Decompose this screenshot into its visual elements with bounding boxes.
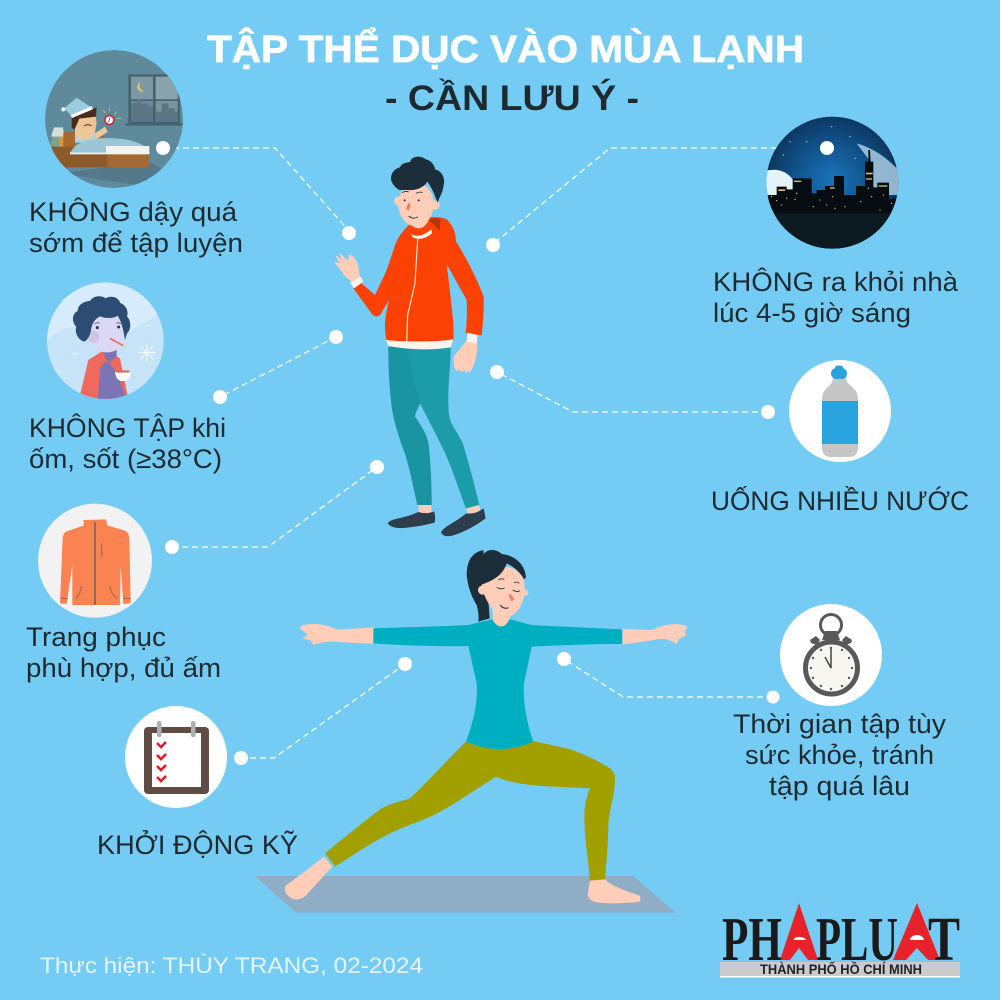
panel: sick person icon (47, 282, 164, 403)
connector dots (156, 141, 834, 765)
trousers (388, 347, 479, 508)
label: clothing: Trang phục (26, 622, 166, 652)
legs (325, 741, 615, 881)
feet (285, 857, 332, 899)
jacket (353, 217, 484, 341)
label: sick: KHÔNG TẬP khi (29, 412, 226, 443)
panel: stopwatch icon (780, 604, 882, 706)
panel: water bottle icon (789, 360, 891, 462)
panel: night city icon (766, 117, 899, 250)
label: duration (733, 709, 947, 801)
illustration: standing man (335, 157, 486, 536)
neck (493, 608, 509, 627)
logo: PLU (816, 906, 898, 974)
panel: jacket icon (38, 504, 152, 618)
connector lines (163, 148, 827, 758)
title: TẬP THỂ DỤC VÀO MÙA LẠNH (207, 26, 804, 71)
label: wake early: KHÔNG dậy quá (29, 196, 238, 227)
label: clothing: phù hợp, đủ ấm (26, 653, 221, 683)
panel: checklist icon (125, 706, 227, 808)
label: wake early (29, 196, 243, 258)
label: water: UỐNG NHIỀU NƯỚC (711, 484, 969, 516)
credit: Thực hiện: THÙY TRANG, 02-2024 (40, 953, 423, 978)
label: night: lúc 4-5 giờ sáng (713, 298, 911, 328)
label: sick: ốm, sốt (≥38°C) (29, 444, 222, 474)
hair back (467, 550, 490, 622)
label: clothing (26, 622, 221, 683)
title: - CẦN LƯU Ý - (385, 78, 639, 118)
arms skin (300, 624, 374, 644)
label: wake early: sớm để tập luyện (29, 228, 243, 258)
logo: T (928, 906, 960, 974)
logo: PH (722, 906, 782, 974)
label: duration: tập quá lâu (769, 771, 910, 801)
neck (412, 220, 430, 237)
ankles and shoes (419, 504, 481, 516)
label: night (713, 266, 959, 328)
hair (73, 296, 130, 342)
shirt (80, 352, 128, 399)
label: duration: sức khỏe, tránh (745, 740, 934, 770)
panel: bedroom icon (45, 50, 184, 188)
sleeves and torso (373, 619, 622, 749)
left hand (335, 255, 360, 280)
right hand (454, 342, 477, 372)
title (207, 26, 804, 118)
logo: THÀNH PHỐ HỒ CHÍ MINH (760, 960, 922, 977)
mat (255, 876, 676, 913)
hair front (479, 550, 526, 585)
logo (720, 903, 960, 978)
label: warm up: KHỞI ĐỘNG KỸ (97, 828, 298, 860)
face (482, 567, 525, 618)
label: duration: Thời gian tập tùy (733, 709, 947, 739)
head (398, 182, 434, 226)
label: night: KHÔNG ra khỏi nhà (713, 266, 959, 297)
illustration: yoga woman (255, 550, 687, 913)
label: sick (29, 412, 226, 474)
